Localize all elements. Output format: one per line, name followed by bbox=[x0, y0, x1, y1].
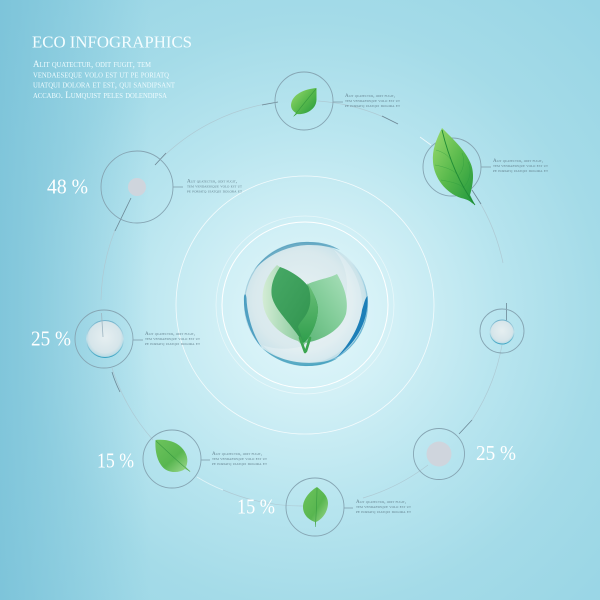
node: left leaf 15 percent: 15 % bbox=[97, 448, 134, 472]
node: bottom right 25 percent bbox=[414, 428, 516, 480]
node: 48 percent: pe poriatq uiatqui dolora et bbox=[187, 190, 242, 194]
node: left leaf 15 percent: pe poriatq uiatqui dolora et bbox=[212, 462, 267, 467]
dot bbox=[426, 442, 452, 466]
node: left leaf 15 percent: Alit quatectur, odit fugit, bbox=[212, 452, 262, 457]
node: left droplet 25 percent: tem vendaeseque volo est ut bbox=[145, 337, 200, 342]
icon: leaf bbox=[303, 487, 328, 527]
lower right crescent bbox=[336, 296, 368, 358]
node: top leaf: pe poriatq uiatqui dolora et bbox=[345, 104, 400, 109]
concentric rings around sphere bbox=[176, 176, 434, 434]
node: left droplet 25 percent: 25 % bbox=[31, 326, 71, 350]
node: 48 percent: tem vendaeseque volo est ut bbox=[187, 184, 242, 190]
node: large green leaf: pe poriatq uiatqui dolora et bbox=[493, 169, 548, 174]
central sphere with leaves bbox=[244, 242, 368, 366]
node: large green leaf: Alit quatectur, odit fugit, bbox=[493, 159, 543, 164]
node: bottom leaf 15 percent: Alit quatectur, odit fugit, bbox=[356, 500, 406, 505]
title: ECO INFOGRAPHICS bbox=[32, 32, 192, 52]
node: right droplet bbox=[480, 309, 524, 353]
icon: leaf bbox=[291, 88, 316, 117]
node: 48 percent: Alit quatectur, odit fugit, bbox=[187, 180, 237, 184]
rim bbox=[244, 242, 368, 366]
node: top leaf: Alit quatectur, odit fugit, bbox=[345, 94, 395, 99]
intro text block: vendaeseque volo est ut pe poriatq bbox=[33, 70, 169, 80]
left rim bbox=[244, 294, 262, 348]
back leaf bbox=[298, 274, 347, 343]
node: 48 percent: 48 % bbox=[47, 174, 88, 198]
icon: leaf bbox=[433, 128, 475, 205]
node: top leaf bbox=[275, 72, 400, 130]
intro text block: uiatqui dolora et est, qui sandipsant bbox=[33, 80, 176, 90]
intro text block bbox=[33, 60, 176, 101]
background left shade bbox=[0, 0, 150, 600]
icon: leaf bbox=[155, 440, 191, 472]
node: left leaf 15 percent: tem vendaeseque volo est ut bbox=[212, 457, 267, 462]
intro text block: accabo. Lumquist peles dolendipsa bbox=[33, 91, 167, 101]
node: bottom leaf 15 percent: pe poriatq uiatqui dolora et bbox=[356, 510, 411, 515]
front leaf bbox=[263, 265, 318, 352]
icon: droplet bbox=[490, 320, 514, 344]
icon: droplet bbox=[86, 313, 124, 358]
node: bottom right 25 percent: 25 % bbox=[476, 441, 516, 465]
intro text block: Alit quatectur, odit fugit, tem bbox=[33, 60, 152, 70]
stems bbox=[300, 338, 310, 352]
node: large green leaf: tem vendaeseque volo est ut bbox=[493, 164, 548, 169]
node: left droplet 25 percent: pe poriatq uiatqui dolora et bbox=[145, 342, 200, 347]
node: top leaf: tem vendaeseque volo est ut bbox=[345, 99, 400, 104]
node: bottom leaf 15 percent: 15 % bbox=[237, 494, 275, 518]
node: bottom leaf 15 percent: tem vendaeseque volo est ut bbox=[356, 505, 411, 510]
node: bottom leaf 15 percent bbox=[237, 478, 411, 536]
node: 48 percent bbox=[47, 151, 242, 223]
orbit: segmented ring bbox=[101, 101, 506, 506]
node: left droplet 25 percent: Alit quatectur, odit fugit, bbox=[145, 332, 195, 337]
node: left droplet 25 percent bbox=[31, 310, 200, 368]
dot bbox=[128, 178, 146, 196]
top rim shade bbox=[254, 242, 340, 270]
inner highlight bbox=[262, 249, 362, 363]
lower rim bbox=[262, 348, 338, 366]
node: left leaf 15 percent bbox=[97, 430, 267, 488]
node: large green leaf bbox=[423, 128, 548, 205]
